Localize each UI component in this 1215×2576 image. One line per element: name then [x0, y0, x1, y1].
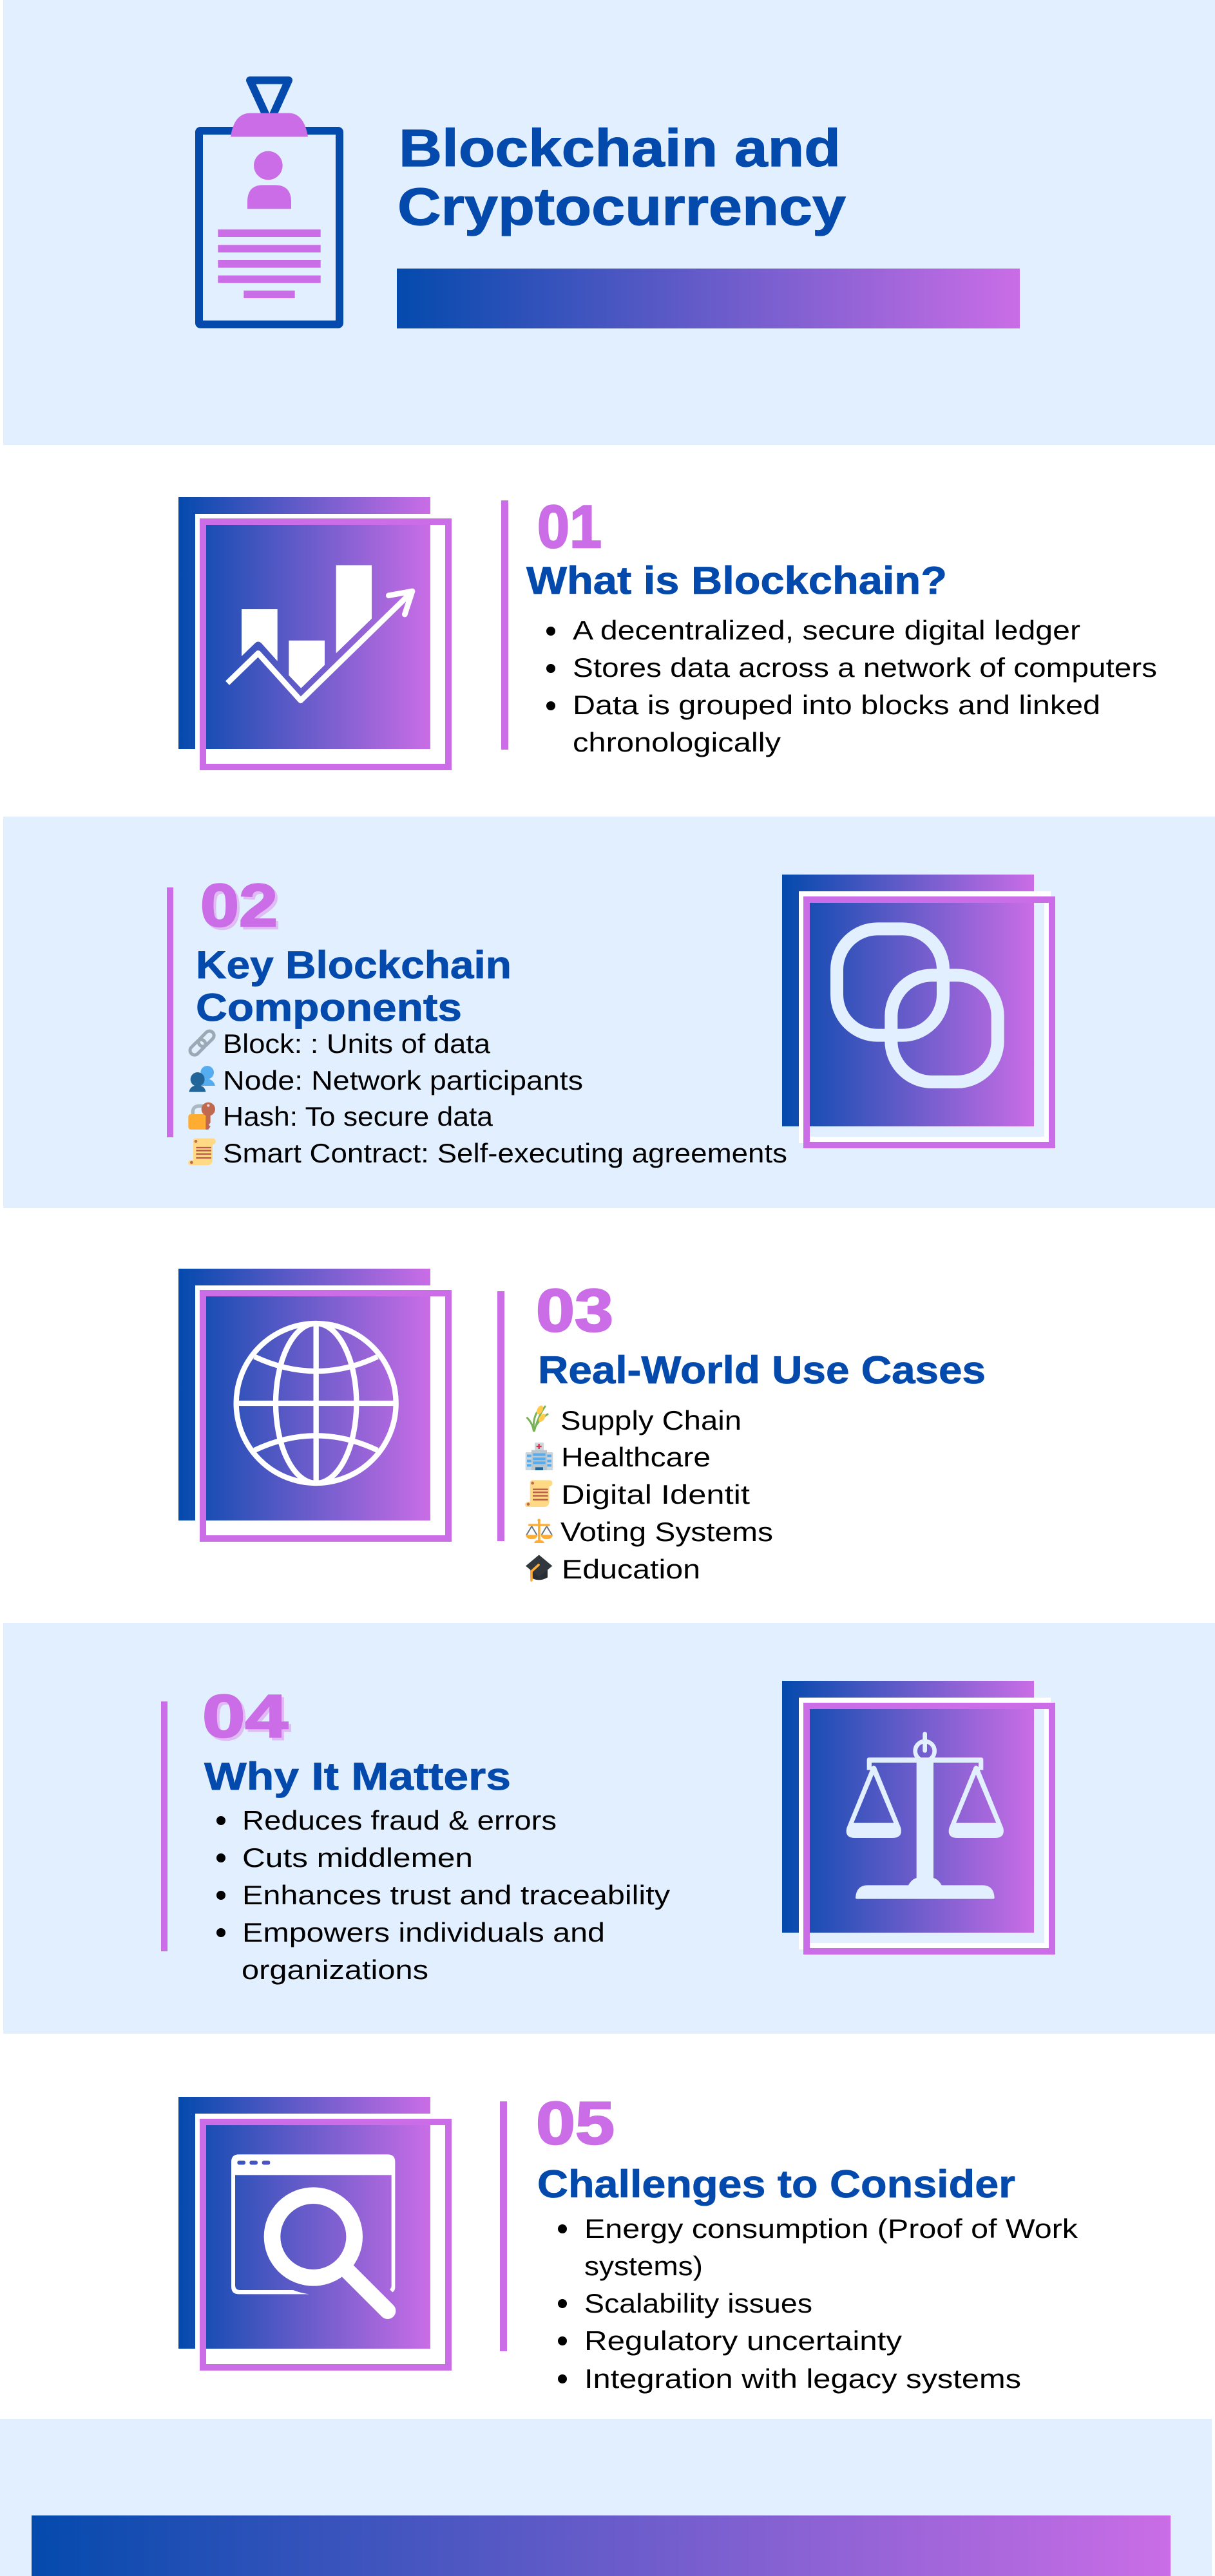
panel: header: [3, 0, 1215, 445]
icon: hospital: [526, 1443, 553, 1470]
accent bar: [497, 1291, 504, 1541]
heading: Why It Matters: [204, 1755, 511, 1798]
panel: section 02 key components: [3, 817, 1215, 1208]
bullet list: Data is grouped into blocks and linked: [573, 690, 1100, 720]
emoji list: Education: [562, 1554, 700, 1584]
panel: section 01 what is blockchain: [178, 493, 1157, 767]
number 05: 05: [536, 2089, 615, 2157]
heading: Real-World Use Cases: [538, 1349, 986, 1392]
icon: wheat: [527, 1405, 548, 1431]
bullet list: Reduces fraud & errors: [242, 1805, 557, 1835]
icon: graduation cap: [526, 1555, 552, 1580]
panel: section 03 use cases: [178, 1269, 986, 1584]
accent bar: [501, 500, 508, 750]
bullet list: organizations: [242, 1955, 428, 1985]
icon: scroll: [525, 1480, 552, 1507]
icon: growth chart in framed square: [178, 497, 448, 767]
accent bar: [167, 887, 173, 1137]
icon: id badge: [199, 80, 340, 325]
accent bar: [161, 1701, 167, 1951]
number 03: 03: [536, 1276, 613, 1344]
number 01: 01: [537, 493, 602, 560]
bullet list: Stores data across a network of computers: [573, 652, 1157, 683]
icon: scales in framed square: [782, 1681, 1052, 1951]
heading: Key Blockchain: [196, 943, 512, 987]
emoji list: [188, 1028, 787, 1168]
emoji list: Voting Systems: [560, 1517, 773, 1547]
heading: Components: [196, 986, 462, 1029]
icon: people: [189, 1066, 215, 1092]
icon: lock and key: [188, 1103, 215, 1130]
bullet list: Cuts middlemen: [242, 1842, 473, 1873]
bullet list: chronologically: [573, 727, 781, 757]
icon: magnifier over window in framed square: [178, 2097, 448, 2367]
emoji list: Hash: To secure data: [223, 1101, 493, 1132]
bullet list: Empowers individuals and: [242, 1917, 605, 1947]
bullet list: systems): [584, 2251, 703, 2281]
title: Blockchain and: [399, 119, 841, 178]
icon: scroll: [188, 1139, 216, 1165]
bullet list: A decentralized, secure digital ledger: [573, 615, 1080, 645]
icon: interlocked links in framed square: [782, 875, 1052, 1145]
emoji list: Digital Identit: [561, 1479, 750, 1510]
emoji list: Smart Contract: Self-executing agreements: [223, 1138, 787, 1168]
emoji list: Healthcare: [561, 1442, 711, 1472]
panel: footer: [0, 2419, 1212, 2576]
bullet list: [558, 2213, 1078, 2394]
panel: section 05 challenges: [178, 2089, 1078, 2394]
gradient bar: [397, 269, 1020, 328]
bullet list: Integration with legacy systems: [584, 2363, 1021, 2394]
panel: section 04 why it matters: [3, 1623, 1215, 2034]
number 02: 02: [200, 871, 278, 939]
bullet list: [216, 1805, 670, 1985]
emoji list: [525, 1405, 773, 1584]
heading: What is Blockchain?: [526, 559, 947, 602]
bullet list: Scalability issues: [584, 2288, 812, 2318]
bullet list: Enhances trust and traceability: [242, 1880, 670, 1910]
emoji list: Block: : Units of data: [223, 1028, 491, 1059]
icon: globe in framed square: [178, 1269, 448, 1539]
number 04: 04: [202, 1682, 288, 1750]
bullet list: Regulatory uncertainty: [584, 2325, 902, 2356]
icon: balance: [526, 1519, 553, 1543]
bullet list: [546, 615, 1157, 757]
title: Cryptocurrency: [397, 178, 846, 236]
icon: link: [188, 1029, 216, 1057]
bullet list: Energy consumption (Proof of Work: [584, 2213, 1078, 2244]
emoji list: Node: Network participants: [223, 1065, 583, 1095]
gradient bar: [32, 2515, 1171, 2576]
emoji list: Supply Chain: [560, 1405, 741, 1435]
accent bar: [500, 2101, 507, 2351]
heading: Challenges to Consider: [537, 2163, 1015, 2206]
